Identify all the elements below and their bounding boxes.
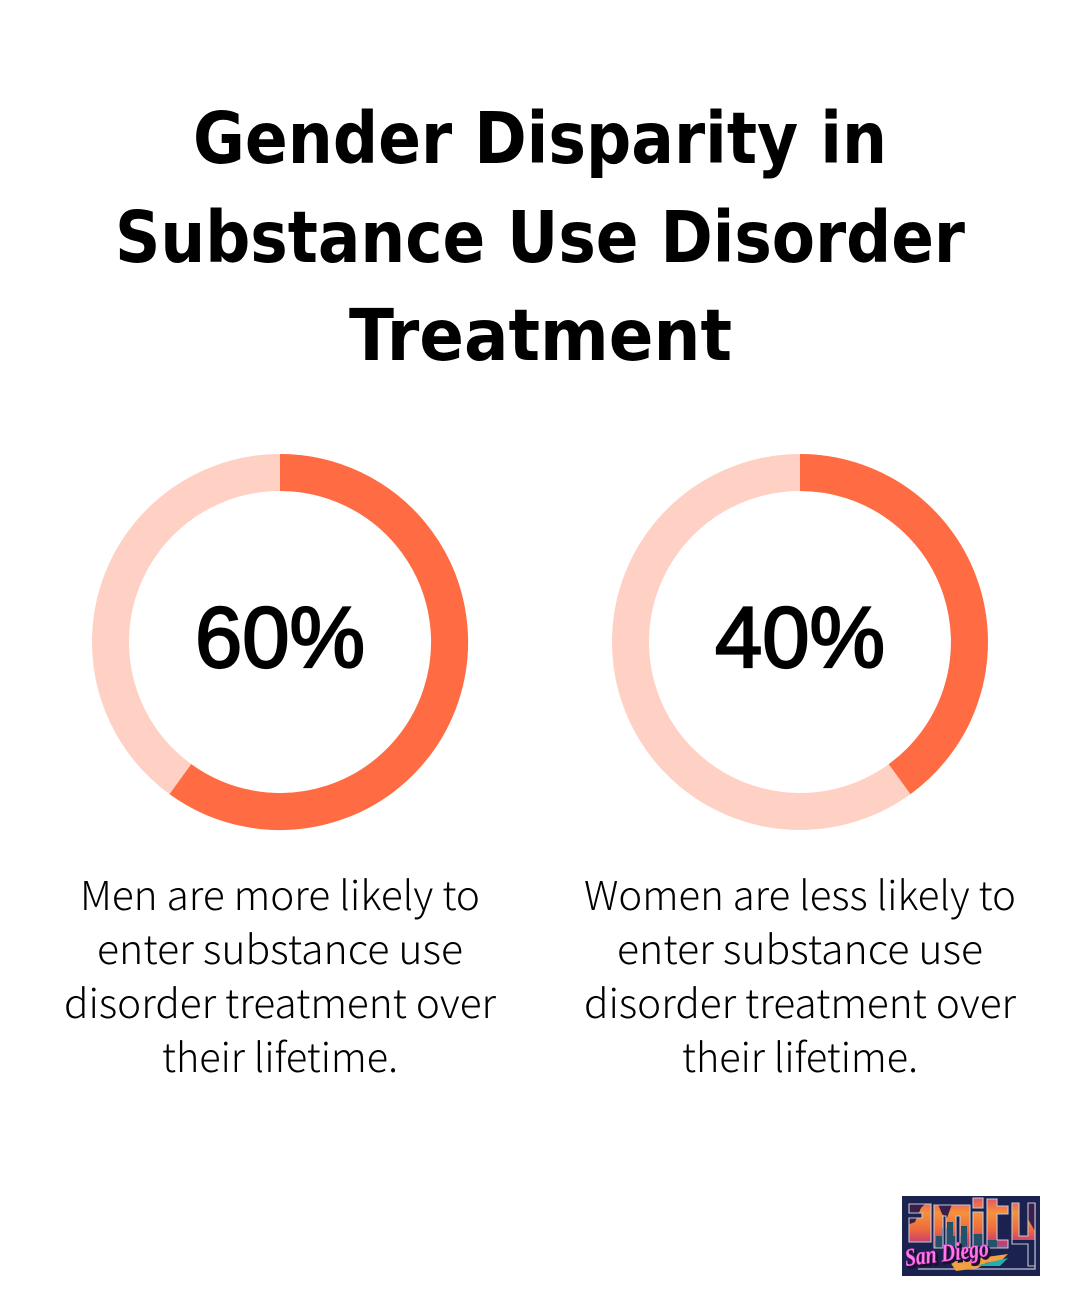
title: Substance Use Disorder — [115, 196, 965, 279]
caption: women: Women are less likely to — [584, 864, 1016, 922]
logo: Amity San Diego — [902, 1196, 1040, 1276]
title — [115, 97, 965, 377]
panel: women 40% — [584, 472, 1017, 1084]
caption: women: their lifetime. — [682, 1026, 918, 1084]
logo: Amity San Diego: San Diego — [905, 1237, 992, 1274]
caption: men: Men are more likely to — [80, 864, 480, 922]
title: Gender Disparity in — [193, 97, 887, 180]
caption: women: enter substance use — [617, 918, 983, 976]
panel: men 60% — [64, 472, 497, 1084]
caption: women: disorder treatment over — [584, 972, 1017, 1030]
donut chart: 40%: 40% — [715, 590, 885, 686]
donut chart: 60%: 60% — [195, 590, 365, 686]
donut chart: 60% — [110, 472, 450, 812]
caption: men: their lifetime. — [162, 1026, 398, 1084]
caption: men: enter substance use — [97, 918, 463, 976]
caption: men — [64, 864, 497, 1084]
logo: Amity San Diego: San Diego — [903, 1235, 990, 1272]
caption: women — [584, 864, 1017, 1084]
title: Treatment — [349, 294, 732, 377]
donut chart: 40% — [630, 472, 970, 812]
caption: men: disorder treatment over — [64, 972, 497, 1030]
